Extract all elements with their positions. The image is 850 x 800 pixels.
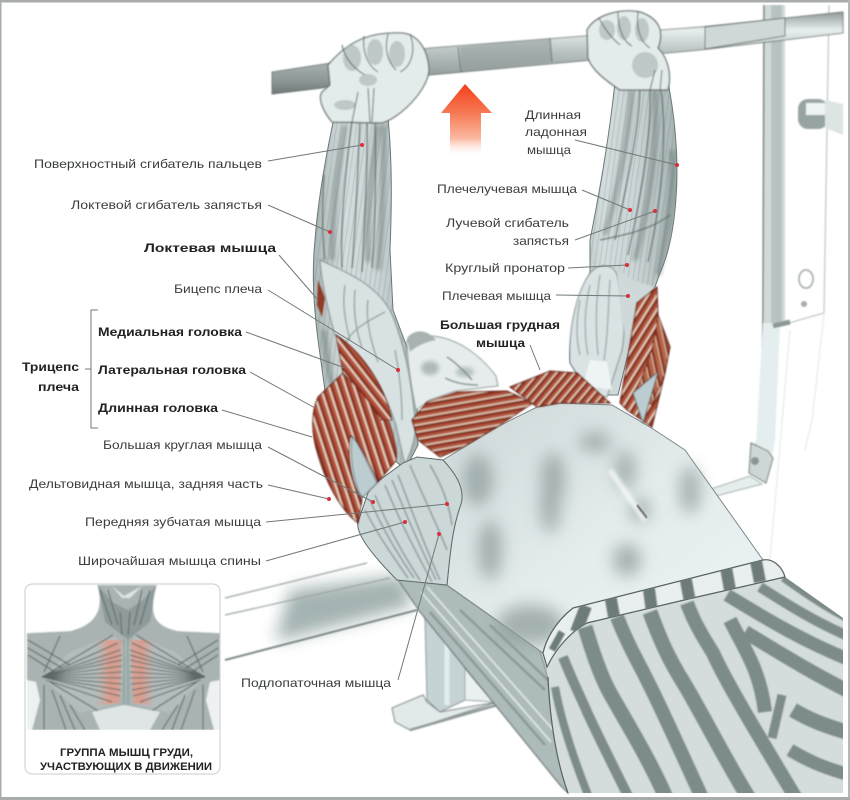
barbell (272, 12, 843, 94)
bench leg and foot (392, 615, 497, 730)
head (407, 331, 498, 410)
bench rail (225, 563, 417, 660)
label: pronator teres: Круглый пронатор (445, 261, 565, 275)
label: of the shoulder: плеча (38, 380, 79, 394)
bench pad (397, 578, 568, 793)
label: subscapularis: Подлопаточная мышца (241, 676, 391, 690)
label: palmaris longus: Длинная (525, 108, 581, 122)
label: flexor carpi radialis line 2: запястья (513, 234, 569, 248)
label: teres major: Большая круглая мышца (103, 438, 262, 452)
label: flexor carpi radialis: Лучевой сгибатель (446, 216, 569, 230)
label: superficial finger flexor: Поверхностный сгибатель пальцев (34, 157, 262, 171)
muscle: left biceps (320, 260, 416, 465)
inset panel: chest muscles (25, 584, 220, 774)
muscle: upper triceps band (336, 335, 392, 420)
rack upright (708, 5, 843, 560)
torso (443, 403, 763, 653)
label: brachioradialis: Плечелучевая мышца (437, 182, 577, 196)
inset caption: УЧАСТВУЮЩИХ В ДВИЖЕНИИ (40, 761, 212, 773)
label: flexor carpi ulnaris: Локтевой сгибатель запястья (71, 198, 262, 212)
muscle: main triceps mass (313, 373, 396, 523)
label: latissimus dorsi: Широчайшая мышца спины (78, 554, 261, 568)
inset caption (40, 747, 212, 773)
striped trousers (543, 556, 850, 800)
muscle: right biceps (570, 266, 624, 397)
labels (22, 108, 587, 690)
label: triceps: Трицепс (22, 360, 79, 374)
label: pectoralis major line 2: мышца (476, 336, 525, 350)
right pectoral (510, 371, 610, 407)
label: triceps medial head: Медиальная головка (98, 325, 242, 339)
arrow: upward (441, 84, 492, 157)
label: serratus anterior: Передняя зубчатая мышца (85, 515, 261, 529)
left triceps (313, 280, 396, 523)
right hand (587, 11, 670, 90)
leader lines (222, 140, 679, 680)
right arm (570, 82, 677, 397)
label: palmaris longus line 3: мышца (527, 143, 571, 157)
muscle: upper narrow head (317, 280, 325, 317)
left pectoral (412, 391, 533, 457)
inset caption: ГРУППА МЫШЦ ГРУДИ, (60, 747, 193, 759)
latissimus and serratus area (358, 457, 462, 585)
left arm (313, 118, 418, 470)
label: palmaris longus line 2: ладонная (525, 125, 587, 139)
label: brachialis: Плечевая мышца (442, 289, 551, 303)
label: triceps long head: Длинная головка (98, 401, 218, 415)
inset illustration (27, 584, 220, 730)
label: anconeus: Локтевая мышца (144, 241, 276, 255)
label: biceps: Бицепс плеча (174, 282, 262, 296)
right triceps (620, 287, 670, 427)
triceps bracket (85, 310, 98, 428)
left hand (320, 33, 429, 123)
label: pectoralis major: Большая грудная (440, 318, 560, 332)
label: posterior deltoid: Дельтовидная мышца, задняя часть (29, 477, 263, 491)
label: triceps lateral head: Латеральная головка (98, 363, 246, 377)
